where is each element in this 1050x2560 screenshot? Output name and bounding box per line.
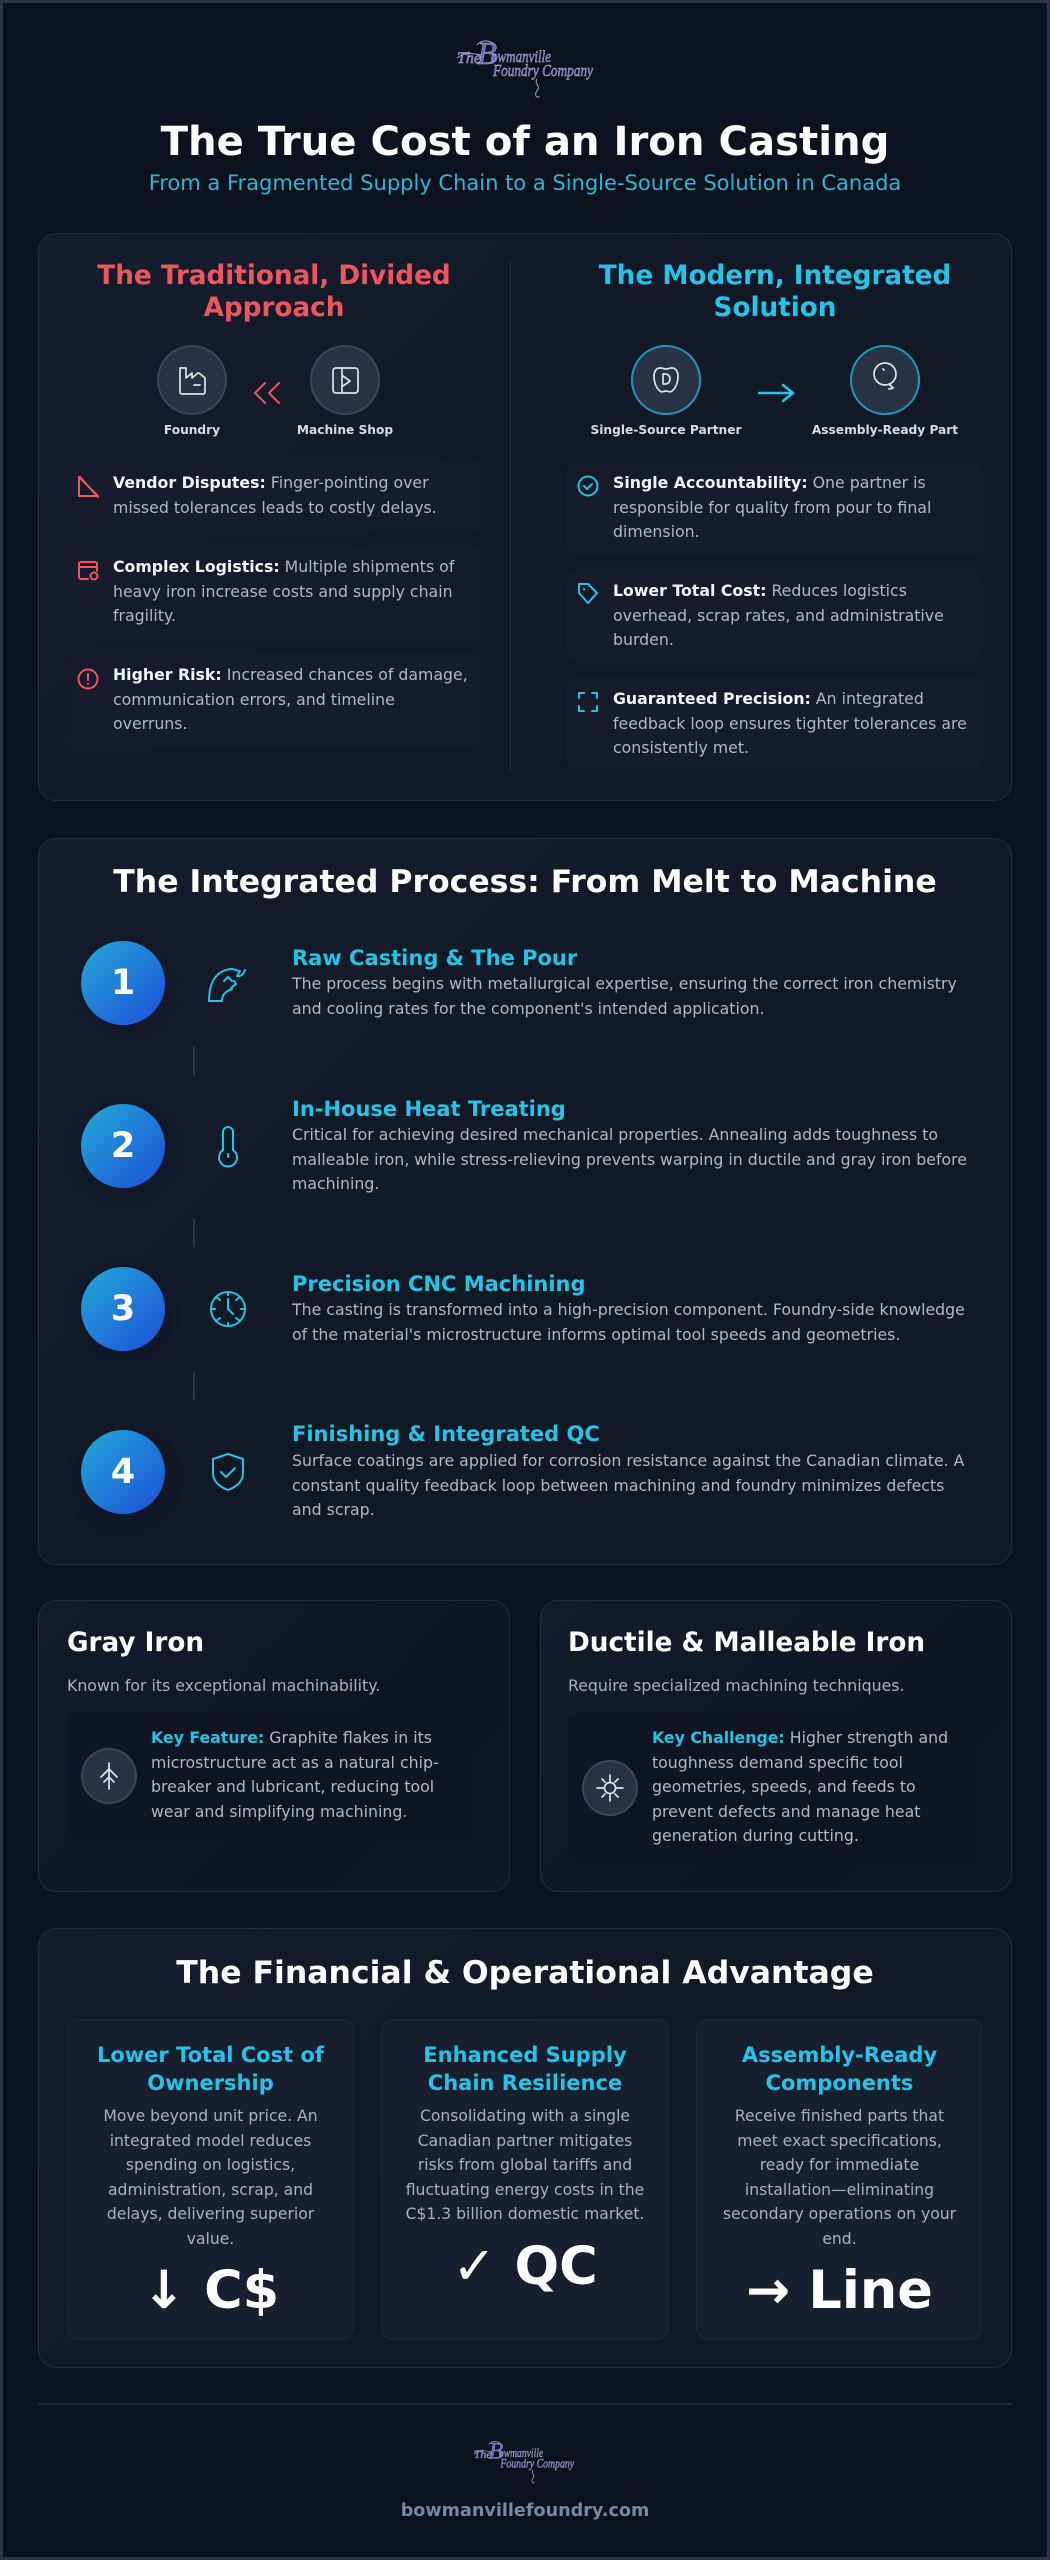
step description: and scrap. xyxy=(292,1500,375,1519)
intro text: Require specialized machining techniques. xyxy=(568,1676,905,1695)
number badge 1: 1 xyxy=(111,963,135,1003)
text: step 3 xyxy=(292,1272,965,1344)
card text: Canadian partner mitigates xyxy=(418,2132,632,2150)
card text: C$1.3 billion domestic market. xyxy=(406,2205,644,2223)
step title: Finishing & Integrated QC xyxy=(292,1422,600,1446)
card text: Move beyond unit price. An xyxy=(103,2107,318,2125)
heading: ductile iron: Ductile & Malleable Iron xyxy=(568,1628,925,1658)
text xyxy=(613,689,967,757)
text: Complex Logistics: Multiple shipments of xyxy=(113,557,454,576)
text: heavy iron increase costs and supply chain xyxy=(113,582,453,600)
text: generation during cutting. xyxy=(652,1826,859,1845)
icon: assembly-ready part xyxy=(850,345,920,415)
step title: Precision CNC Machining xyxy=(292,1272,586,1296)
text: Vendor Disputes: Finger-pointing over xyxy=(113,473,429,492)
card title: Ownership xyxy=(147,2071,274,2095)
title: The True Cost of an Iron Casting xyxy=(161,119,889,165)
card: assembly-ready components xyxy=(696,2019,983,2340)
footer website: bowmanvillefoundry.com xyxy=(401,2501,649,2521)
card: lower total cost of ownership xyxy=(67,2019,354,2340)
icon: triangle xyxy=(78,476,99,498)
vertical divider xyxy=(510,261,511,771)
heading: integrated solution: The Modern, Integrated xyxy=(599,261,951,291)
step 1 xyxy=(81,941,957,1025)
label: assembly-ready part: Assembly-Ready Part xyxy=(812,423,958,437)
step description: of the material's microstructure informs optimal tool speeds and geometries. xyxy=(292,1324,900,1344)
icon: graphite xyxy=(81,1748,137,1804)
icon: check circle xyxy=(578,476,598,496)
card title: Components xyxy=(766,2071,913,2095)
panel: integrated process xyxy=(38,838,1012,1565)
step description xyxy=(292,1125,967,1193)
text: wear and simplifying machining. xyxy=(151,1802,407,1820)
text: Single Accountability: One partner is xyxy=(613,473,926,492)
text xyxy=(652,1728,948,1845)
heading: integrated solution: Solution xyxy=(714,293,836,323)
callout: key feature xyxy=(67,1713,477,1838)
heading: integrated solution xyxy=(598,261,951,323)
text xyxy=(113,557,455,625)
heading: process: The Integrated Process: From Melt to Machine xyxy=(113,864,937,900)
text: Guaranteed Precision: An integrated xyxy=(613,689,924,708)
text: overhead, scrap rates, and administrative xyxy=(613,606,944,624)
step title: In-House Heat Treating xyxy=(292,1097,566,1121)
card text: ready for immediate xyxy=(760,2156,919,2174)
footer logo: B xyxy=(489,2439,503,2465)
step 4 xyxy=(81,1422,964,1519)
footer logo: The xyxy=(474,2447,492,2461)
item: higher risk xyxy=(68,653,482,747)
card title: Chain Resilience xyxy=(428,2071,622,2095)
icon: focus frame xyxy=(578,692,598,712)
card text: integrated model reduces xyxy=(110,2132,311,2150)
card text: delays, delivering superior xyxy=(107,2205,314,2223)
card text: Consolidating with a single xyxy=(420,2107,630,2125)
card title xyxy=(423,2043,627,2095)
heading: traditional approach xyxy=(97,261,451,323)
text: step 1 xyxy=(292,946,957,1018)
text: step 4 xyxy=(292,1422,964,1519)
text xyxy=(113,473,437,516)
item: single accountability xyxy=(567,460,983,555)
card text: Receive finished parts that xyxy=(735,2107,944,2125)
icon: foundry xyxy=(157,345,227,415)
icon: pour xyxy=(208,968,246,1002)
text: Key Challenge: Higher strength and xyxy=(652,1728,948,1747)
heading: gray iron: Gray Iron xyxy=(67,1628,204,1658)
subtitle: From a Fragmented Supply Chain to a Single-Source Solution in Canada xyxy=(149,171,901,195)
card title xyxy=(97,2043,324,2095)
card title: Lower Total Cost of xyxy=(97,2043,324,2067)
step description: The casting is transformed into a high-precision component. Foundry-side knowledge xyxy=(292,1300,965,1319)
text: step 2 xyxy=(292,1097,967,1193)
card title xyxy=(696,2041,983,2097)
card title: Assembly-Ready xyxy=(742,2043,937,2067)
logo: Bowmanville Foundry Company: The xyxy=(457,50,481,67)
card text: risks from global tariffs and xyxy=(418,2156,632,2174)
logo: Bowmanville Foundry Company: owmanville xyxy=(491,47,551,66)
step description: Critical for achieving desired mechanical properties. Annealing adds toughness to xyxy=(292,1125,938,1144)
text: communication errors, and timeline xyxy=(113,690,395,708)
text: overruns. xyxy=(113,714,188,733)
text: microstructure act as a natural chip- xyxy=(151,1752,439,1772)
callout: key challenge xyxy=(568,1713,980,1862)
number badge 4: 4 xyxy=(111,1452,135,1492)
heading: traditional approach: Approach xyxy=(204,293,344,323)
heading: advantage: The Financial & Operational Advantage xyxy=(176,1955,874,1991)
item: lower total cost xyxy=(567,569,983,663)
text: prevent defects and manage heat xyxy=(652,1802,920,1820)
step 3 xyxy=(81,1267,965,1351)
icon: package xyxy=(78,561,98,580)
card text: meet exact specifications, xyxy=(737,2132,942,2150)
step description: constant quality feedback loop between machining and foundry minimizes defects xyxy=(292,1476,944,1494)
text: missed tolerances leads to costly delays. xyxy=(113,498,437,516)
step title: Raw Casting & The Pour xyxy=(292,946,577,970)
panel: gray iron xyxy=(38,1600,510,1892)
icon: gear xyxy=(582,1760,638,1816)
step description: The process begins with metallurgical expertise, ensuring the correct iron chemistry xyxy=(292,974,957,993)
text: consistently met. xyxy=(613,738,749,757)
stat: ↓ C$ xyxy=(142,2260,279,2321)
text: feedback loop ensures tighter tolerances are xyxy=(613,714,967,732)
text: dimension. xyxy=(613,522,700,541)
connector lines xyxy=(193,1046,195,1400)
stat: ✓ QC xyxy=(452,2236,598,2297)
icon: dial xyxy=(210,1291,246,1327)
label: machine shop: Machine Shop xyxy=(297,423,393,437)
text: responsible for quality from pour to final xyxy=(613,498,931,516)
card: enhanced supply chain resilience xyxy=(381,2019,669,2340)
panel: comparison xyxy=(38,233,1012,801)
icon: single-source partner xyxy=(631,345,701,415)
text xyxy=(151,1728,439,1820)
number badge 4 xyxy=(81,1430,165,1514)
text: Lower Total Cost: Reduces logistics xyxy=(613,581,907,600)
number badge 2: 2 xyxy=(111,1126,135,1166)
label: single-source partner: Single-Source Partner xyxy=(590,423,742,437)
step description xyxy=(292,974,957,1018)
footer divider xyxy=(38,2403,1012,2405)
text: Higher Risk: Increased chances of damage, xyxy=(113,665,468,684)
text xyxy=(113,665,468,733)
logo: Bowmanville Foundry Company: B xyxy=(477,35,497,71)
card text: end. xyxy=(822,2230,857,2248)
text xyxy=(613,581,944,649)
step description: and cooling rates for the component's intended application. xyxy=(292,998,764,1018)
footer logo xyxy=(465,2437,583,2489)
card text: spending on logistics, xyxy=(126,2156,295,2174)
card text xyxy=(103,2107,318,2248)
text: toughness demand specific tool xyxy=(652,1752,903,1772)
icon: thermometer xyxy=(218,1126,238,1168)
text xyxy=(613,473,931,541)
number badge 1 xyxy=(81,941,165,1025)
icon: separation chevrons xyxy=(254,382,280,404)
icon: alert xyxy=(78,668,98,690)
text: fragility. xyxy=(113,606,176,625)
step description: malleable iron, while stress-relieving prevents warping in ductile and gray iron before xyxy=(292,1150,967,1168)
logo: Bowmanville Foundry Company xyxy=(456,35,594,98)
card text xyxy=(406,2107,644,2223)
intro text: Known for its exceptional machinability. xyxy=(67,1676,380,1695)
step description xyxy=(292,1300,965,1344)
card text: value. xyxy=(187,2230,234,2248)
label: foundry: Foundry xyxy=(164,423,220,437)
panel: ductile and malleable iron xyxy=(540,1600,1012,1892)
footer logo: owmanville xyxy=(499,2446,544,2460)
arrow: integrated flow xyxy=(758,384,794,402)
text: burden. xyxy=(613,630,674,649)
step description: Surface coatings are applied for corrosion resistance against the Canadian climate. A xyxy=(292,1451,964,1470)
text: geometries, speeds, and feeds to xyxy=(652,1777,916,1796)
text: Key Feature: Graphite flakes in its xyxy=(151,1728,432,1747)
number badge 3: 3 xyxy=(111,1289,135,1329)
item: guaranteed precision xyxy=(567,677,983,772)
step description: machining. xyxy=(292,1174,379,1193)
step 2 xyxy=(81,1097,967,1193)
icon: machine shop xyxy=(310,345,380,415)
card text xyxy=(696,2104,983,2251)
text: breaker and lubricant, reducing tool xyxy=(151,1777,434,1796)
card text: installation—eliminating xyxy=(745,2180,934,2198)
number badge 2 xyxy=(81,1104,165,1188)
card text: secondary operations on your xyxy=(723,2205,956,2223)
icon: shield check xyxy=(212,1453,244,1491)
stat: → Line xyxy=(746,2260,933,2321)
heading: traditional approach: The Traditional, Divided xyxy=(97,261,451,291)
item: vendor disputes xyxy=(68,460,482,532)
card text: fluctuating energy costs in the xyxy=(406,2180,644,2198)
number badge 3 xyxy=(81,1267,165,1351)
panel: financial and operational advantage xyxy=(38,1928,1012,2368)
card title: Enhanced Supply xyxy=(423,2043,627,2067)
item: complex logistics xyxy=(68,545,482,640)
step description xyxy=(292,1451,964,1519)
card text: administration, scrap, and xyxy=(108,2180,313,2198)
icon: tag xyxy=(578,583,598,604)
